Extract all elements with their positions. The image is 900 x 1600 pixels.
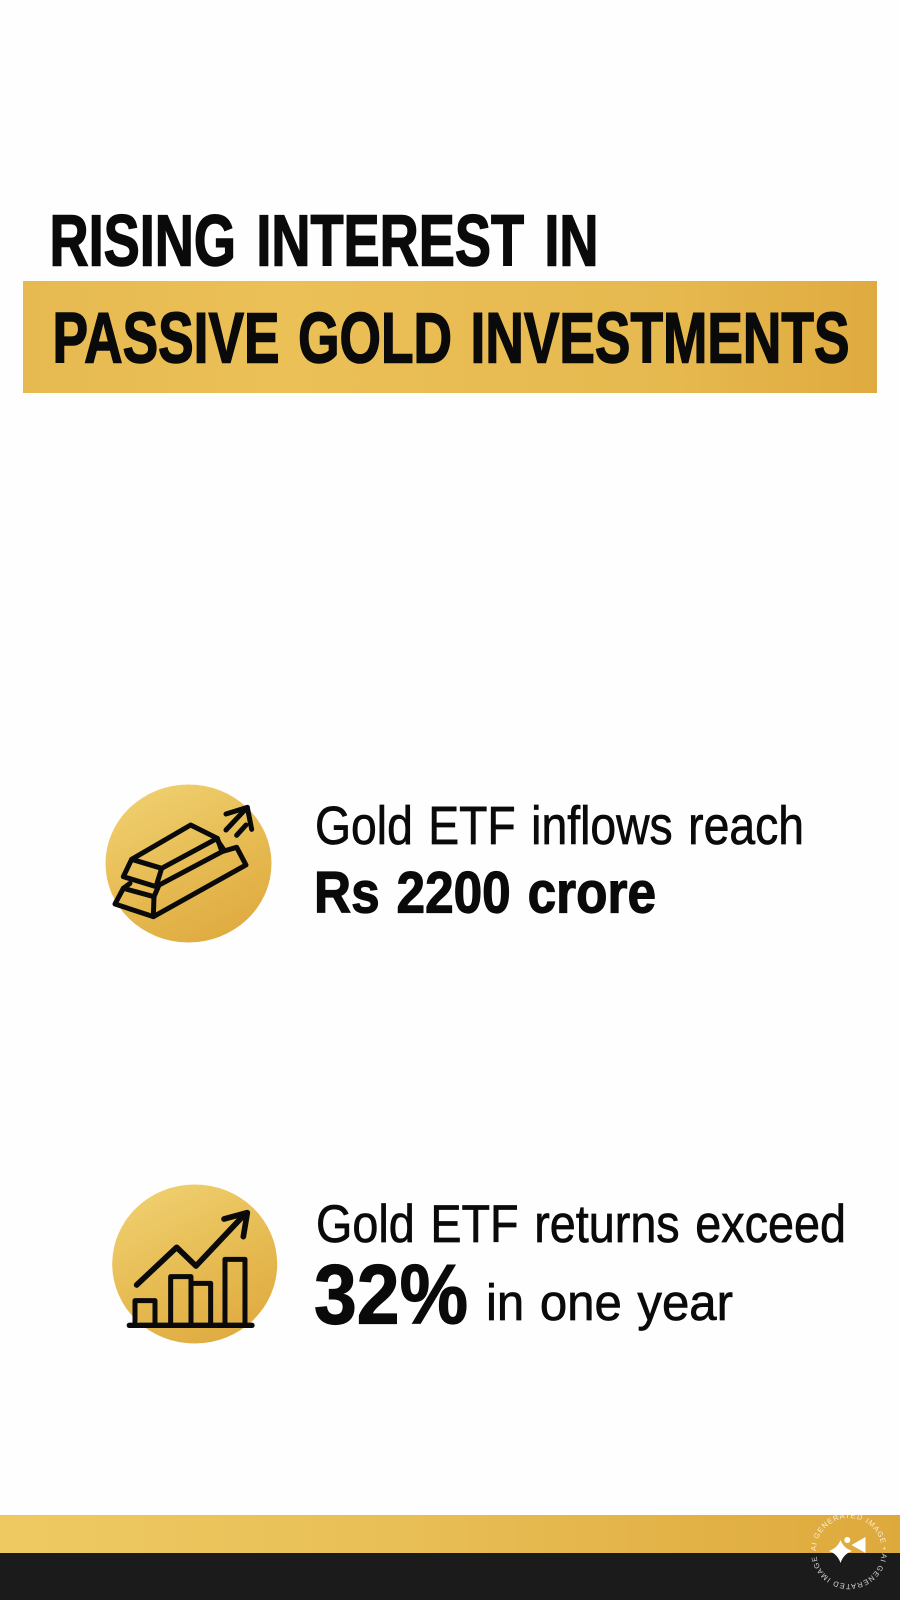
stat: gold ETF returns bbox=[112, 1184, 846, 1344]
stat: gold ETF inflows bbox=[106, 784, 804, 942]
stat value: 32%: 32% bbox=[314, 1248, 468, 1342]
stat text: in one year: in one year bbox=[486, 1274, 733, 1331]
gold title banner bbox=[23, 281, 877, 393]
stat value: Rs 2200 crore bbox=[314, 860, 656, 926]
stat text line 1: Gold ETF inflows reach bbox=[315, 796, 804, 856]
stat text line 1: Gold ETF returns exceed bbox=[316, 1195, 846, 1254]
title bbox=[23, 202, 877, 393]
footer band bbox=[0, 1515, 900, 1600]
title line 1: RISING INTEREST IN bbox=[50, 202, 598, 282]
watermark badge: AI GENERATED IMAGE • AI GENERATED IMAGE • bbox=[811, 1515, 887, 1590]
icon: gold bars with arrow bbox=[106, 784, 272, 942]
icon: bar chart with rising arrow bbox=[112, 1184, 277, 1344]
